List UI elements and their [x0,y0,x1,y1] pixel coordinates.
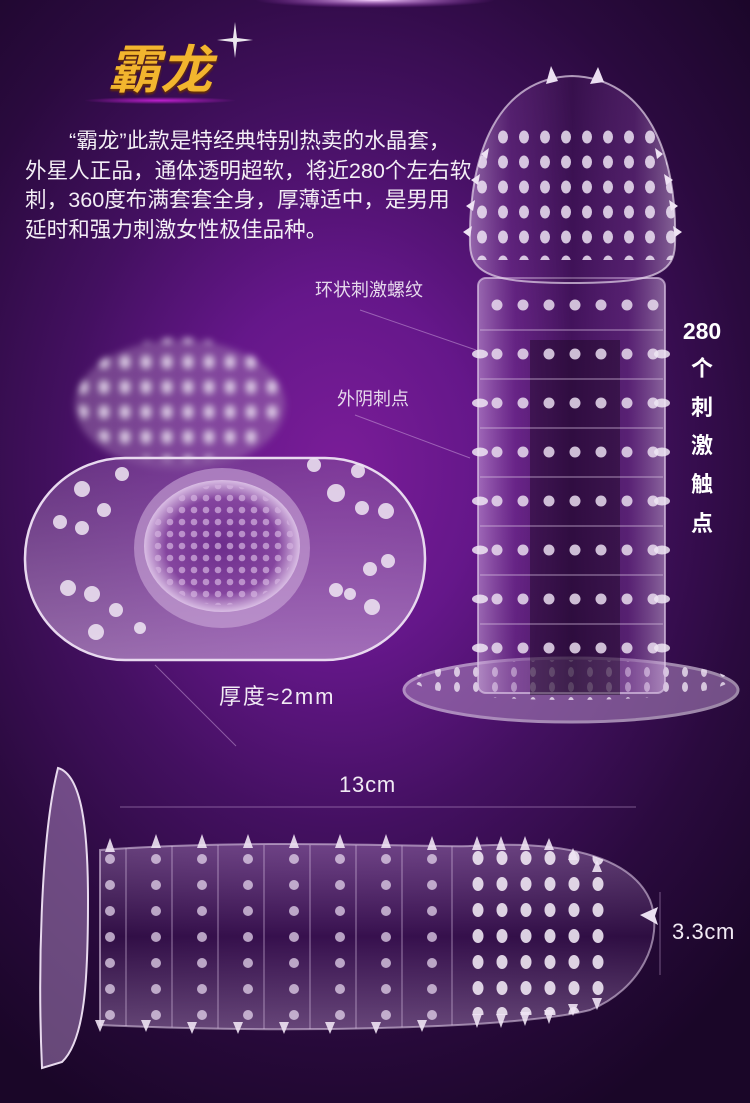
width measurement: 3.3cm [672,919,735,944]
callout: 280 stimulation points: 280 [683,318,721,344]
blurred sleeve behind ring [75,338,285,470]
base flange [404,658,738,722]
callout: 280 stimulation points: 触 [691,472,713,497]
title underline glow [85,97,235,104]
ring dots [53,458,395,640]
thickness measurement: 厚度≈2mm [219,684,335,709]
ring product [25,458,425,660]
label: ring texture: 环状刺激螺纹 [315,280,423,300]
leader lines [120,310,660,975]
callout: 280 stimulation points: 个 [691,356,713,381]
description text: 外星人正品，通体透明超软，将近280个左右软 [25,158,471,183]
horizontal sleeve product [40,768,658,1068]
top glow [255,0,495,8]
shaft ribs [480,330,663,624]
head side spikes [463,148,682,237]
horizontal spikes [95,834,602,1034]
tip spikes [546,66,604,84]
label: outer stimulation points: 外阴刺点 [337,389,409,409]
callout: 280 stimulation points: 刺 [691,395,713,420]
shaft side spikes [472,339,488,682]
length measurement: 13cm [339,772,396,797]
vertical sleeve product [404,66,738,722]
head [470,76,675,283]
shaft [478,278,665,693]
description text [25,128,471,242]
title: 霸龙 [108,42,212,100]
callout: 280 stimulation points: 点 [691,511,713,536]
callout: 280 stimulation points: 激 [691,433,713,458]
callout: 280 stimulation points [683,318,721,536]
description text: 刺，360度布满套套全身，厚薄适中，是男用 [25,187,450,212]
description text: 延时和强力刺激女性极佳品种。 [25,217,327,242]
flange side [40,768,88,1068]
icon: title sparkle [217,22,253,58]
description text: “霸龙”此款是特经典特别热卖的水晶套， [69,128,450,153]
